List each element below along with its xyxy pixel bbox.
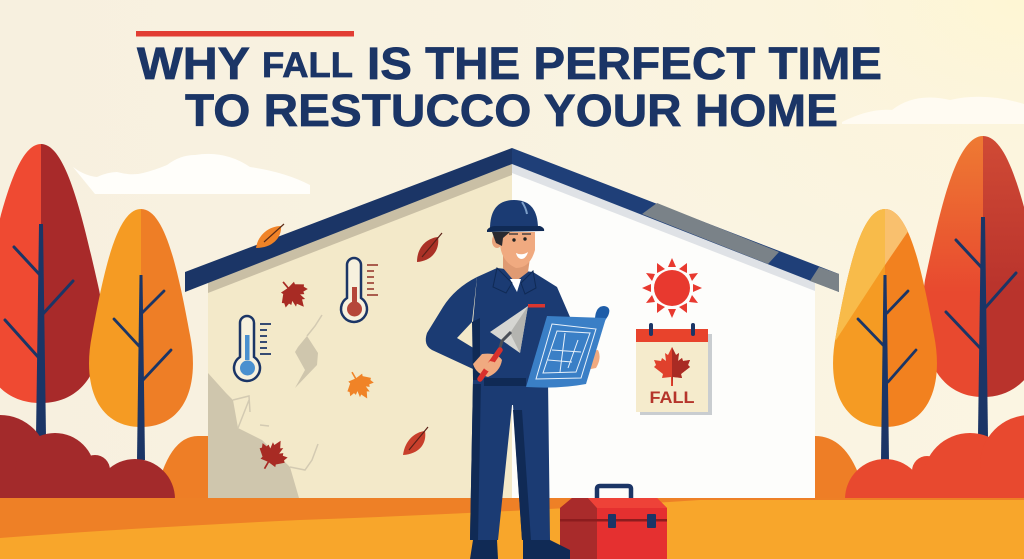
accent bar	[136, 31, 354, 36]
icon: sun	[642, 258, 702, 318]
tree: right orange	[833, 209, 937, 460]
worker legs	[470, 380, 550, 540]
worker hard hat	[487, 200, 544, 232]
trunk and branches	[114, 275, 171, 460]
toolbox body	[560, 498, 667, 559]
worker shirt	[510, 279, 521, 292]
bush: left orange	[155, 436, 208, 498]
leaf: maple dark red	[272, 273, 315, 316]
blueprint plan lines	[536, 324, 596, 379]
cloud right	[842, 97, 1024, 124]
worker	[426, 200, 609, 559]
bush: right orange	[815, 436, 868, 498]
trunk and branches	[858, 275, 916, 460]
house	[185, 148, 839, 498]
calendar label: FALL	[650, 389, 694, 407]
hand	[473, 354, 502, 377]
leaf: red upper	[417, 233, 442, 262]
leaf: maple bottom	[252, 434, 293, 476]
icon: fall calendar	[636, 323, 712, 415]
worker neck	[503, 255, 530, 282]
title line 1: IS THE PERFECT TIME	[367, 38, 882, 89]
trowel blade	[490, 306, 528, 353]
tree: far left red	[0, 144, 103, 437]
calendar maple leaf	[654, 347, 690, 386]
ground	[0, 498, 1024, 559]
bush: left dark red	[0, 415, 175, 539]
title line 2: TO RESTUCCO YOUR HOME	[185, 85, 838, 136]
trunk and branches	[946, 217, 1016, 438]
title	[137, 38, 882, 136]
roof shadow left	[208, 160, 512, 293]
tree: far right red	[922, 136, 1024, 438]
worker right hand	[580, 350, 600, 370]
trunk and branches	[5, 224, 73, 437]
worker pocket tag	[528, 304, 545, 308]
roof faded segments	[642, 203, 839, 292]
blueprint	[526, 306, 609, 388]
cloud left	[73, 154, 310, 194]
worker torso	[473, 268, 570, 384]
title line 1	[137, 38, 882, 89]
roof shadow right	[512, 160, 815, 291]
thermometer: warm	[341, 258, 378, 322]
worker boots	[470, 540, 570, 559]
toolbox	[560, 486, 667, 559]
wall damage patch	[208, 373, 299, 498]
worker left arm	[426, 277, 480, 369]
leaf: red lower	[403, 427, 428, 455]
worker collar	[493, 268, 536, 294]
worker head	[492, 232, 535, 268]
bush: right red	[845, 415, 1024, 539]
worker hand with trowel	[473, 306, 528, 379]
toolbox latches	[608, 514, 616, 528]
leaf: maple orange	[340, 365, 379, 405]
roof left	[185, 148, 512, 292]
leaf: orange on roof	[256, 224, 284, 248]
toolbox handle	[597, 486, 631, 500]
worker belt	[484, 378, 526, 386]
roof right	[512, 148, 839, 292]
thermometer: cold	[234, 316, 271, 381]
trowel handle	[480, 350, 500, 379]
wall: left cream	[208, 164, 512, 498]
title line 1: WHY	[137, 38, 250, 89]
wall: right white	[512, 164, 815, 498]
trowel neck	[499, 332, 511, 351]
tree: left orange	[89, 209, 193, 460]
title line 1: FALL	[262, 46, 353, 85]
wall crack	[233, 315, 322, 470]
